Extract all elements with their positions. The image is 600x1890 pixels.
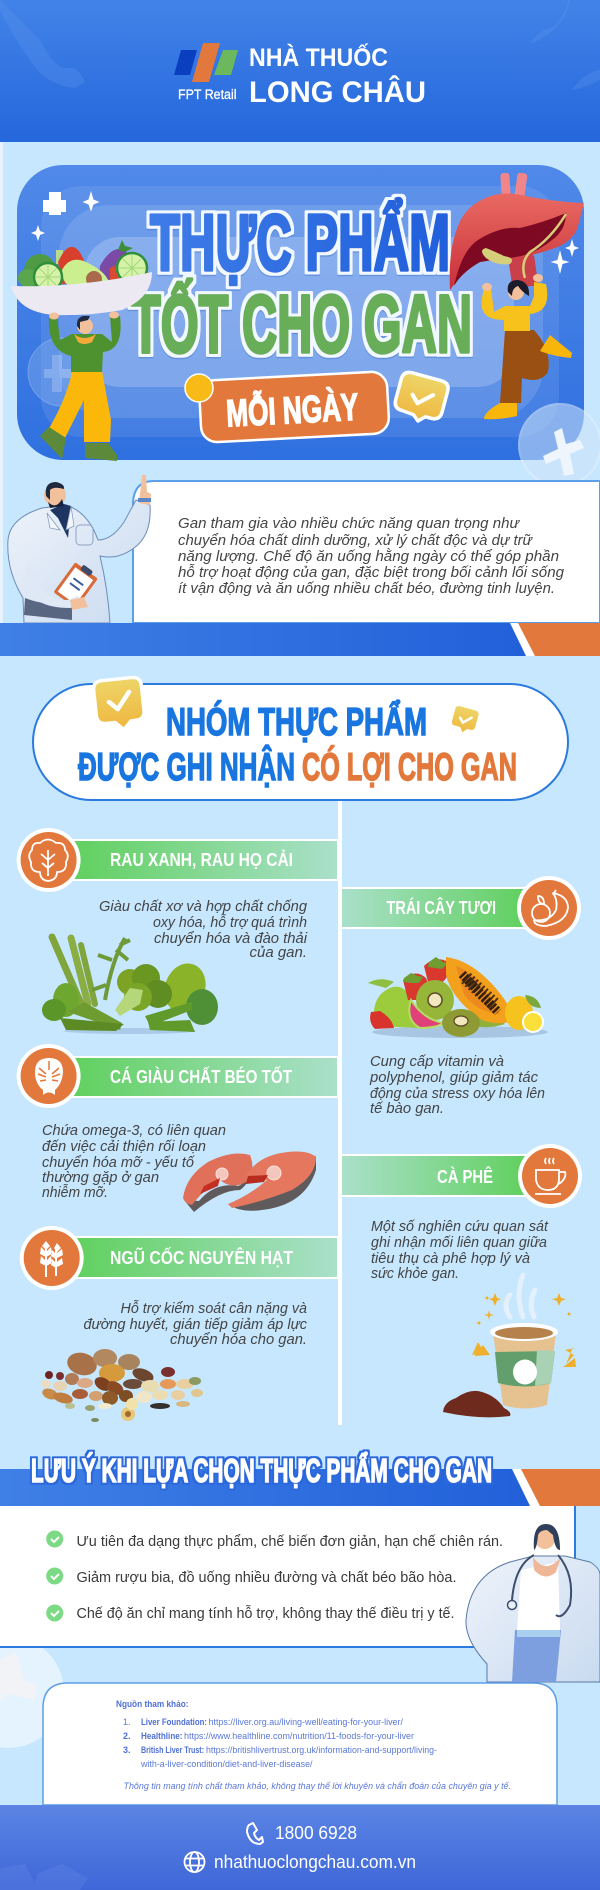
description: tế bào gan.: [370, 1101, 444, 1117]
title bar: CÁ GIÀU CHẤT BÉO TỐT: [110, 1066, 292, 1087]
description: đường huyết, gián tiếp giảm áp lực: [84, 1317, 308, 1333]
icon: fruit: [517, 876, 581, 940]
reference 3: [123, 1745, 437, 1769]
description: của gan.: [250, 945, 307, 961]
title bar: NGŨ CỐC NGUYÊN HẠT: [110, 1247, 293, 1268]
description: Giàu chất xơ và hợp chất chống: [99, 899, 307, 915]
illustration: woman holding liver: [481, 274, 572, 419]
description: đến việc cải thiện rối loạn: [42, 1139, 206, 1155]
band: blue and orange divider: [0, 623, 600, 656]
description: polyphenol, giúp giảm tác: [369, 1070, 539, 1086]
title bar: RAU XANH, RAU HỌ CẢI: [110, 849, 293, 870]
panel: whole grains: [20, 1226, 338, 1422]
panel: coffee: [342, 1144, 582, 1417]
reference 3: with-a-liver-condition/diet-and-liver-disease/: [140, 1759, 313, 1769]
section heading pill: [33, 684, 568, 800]
reference 3: British Liver Trust:: [141, 1745, 204, 1755]
man: [48, 371, 111, 442]
description: Chứa omega-3, có liên quan: [42, 1123, 226, 1139]
description: [84, 1300, 308, 1348]
description: Cung cấp vitamin và: [370, 1054, 504, 1070]
title bar: [342, 1155, 529, 1196]
description: sức khỏe gan.: [371, 1266, 459, 1282]
reference 2: 2.: [123, 1731, 131, 1741]
panel: references: [43, 1683, 557, 1805]
disclaimer: Thông tin mang tính chất tham khảo, không thay thế lời khuyên và chẩn đoán của chuyên gia y tế.: [124, 1781, 511, 1791]
description: [371, 1219, 549, 1282]
description: tiêu thụ cà phê hợp lý và: [371, 1251, 530, 1267]
description: chuyển hóa cho gan.: [170, 1332, 307, 1348]
illustration: male doctor pointing: [8, 475, 151, 623]
panel: notes list: [0, 1506, 575, 1647]
illustration: liver: [450, 172, 584, 290]
icon: phone: [247, 1823, 263, 1844]
description: [99, 899, 308, 961]
description: [42, 1123, 226, 1201]
icon: sparkles: [31, 191, 579, 274]
header band: [0, 0, 600, 142]
left edge stripe: [0, 142, 3, 623]
reference 3: https://britishlivertrust.org.uk/information-and-support/living-: [206, 1745, 437, 1755]
description: nhiễm mỡ.: [42, 1184, 108, 1201]
logo: FPT Retail mark: [174, 43, 238, 102]
description: chuyển hóa và đào thải: [154, 931, 308, 947]
panel: introduction text: năng lượng. Chế độ ăn uống hằng ngày có thể góp phần: [178, 548, 559, 565]
title bar: [70, 840, 338, 880]
reference 2: https://www.healthline.com/nutrition/11-foods-for-your-liver: [184, 1731, 414, 1741]
title bar: CÀ PHÊ: [437, 1166, 493, 1187]
description: [369, 1054, 545, 1117]
reference 1: https://liver.org.au/living-well/eating-for-your-liver/: [208, 1717, 403, 1727]
note 1: Ưu tiên đa dạng thực phẩm, chế biến đơn giản, hạn chế chiên rán.: [76, 1534, 503, 1550]
note 2: Giảm rượu bia, đồ uống nhiều đường và chất béo bão hòa.: [76, 1570, 456, 1586]
title bar: TRÁI CÂY TƯƠI: [386, 897, 496, 918]
panel: hero banner: [17, 165, 584, 460]
description: chuyển hóa mỡ - yếu tố: [42, 1155, 196, 1171]
icon: lettuce: [17, 828, 81, 892]
steak right: [228, 1155, 316, 1211]
hero title: [131, 198, 472, 370]
steak left: [184, 1160, 253, 1212]
badge: every day: [185, 371, 390, 443]
section heading pill: NHÓM THỰC PHẨM: [166, 699, 427, 744]
icon: coffee cup: [518, 1144, 582, 1208]
reference 2: Healthline:: [141, 1731, 182, 1741]
vegetables: [18, 240, 147, 291]
brand name: NHÀ THUỐC: [249, 42, 388, 72]
description: Hỗ trợ kiểm soát cân nặng và: [120, 1300, 307, 1317]
title bar: [72, 1237, 338, 1278]
section heading pill: ĐƯỢC GHI NHẬN: [78, 745, 295, 789]
note 3: Chế độ ăn chỉ mang tính hỗ trợ, không thay thế điều trị y tế.: [76, 1605, 454, 1622]
illustration: fruit pile: [368, 957, 548, 1038]
icon: fish steak: [17, 1044, 81, 1108]
logo: FPT Retail mark: FPT Retail: [178, 87, 236, 102]
icon: bubble lower left: [0, 1636, 64, 1748]
contact: website: nhathuoclongchau.com.vn: [214, 1852, 416, 1872]
reference 3: 3.: [123, 1745, 131, 1755]
footer band: [0, 1805, 600, 1890]
panel: introduction text: Gan tham gia vào nhiều chức năng quan trọng như: [178, 516, 521, 532]
illustration: salmon steaks: [183, 1152, 316, 1212]
reference 1: 1.: [123, 1717, 131, 1727]
illustration: nuts and seeds: [41, 1349, 203, 1422]
panel: fresh fruit: [342, 876, 581, 1117]
brand name: LONG CHÂU: [249, 75, 426, 109]
description: oxy hóa, hỗ trợ quá trình: [153, 914, 307, 931]
reference 1: Liver Foundation:: [141, 1717, 207, 1727]
icon: check sticker small: [449, 704, 481, 737]
icon: white cross: [43, 192, 66, 215]
icon: check sticker large: [93, 677, 146, 732]
badge: every day: MỖI NGÀY: [225, 384, 359, 436]
panel: references: Nguồn tham khảo:: [116, 1699, 188, 1709]
bowl: [11, 272, 152, 315]
title bar: [70, 1057, 338, 1097]
vertical divider: [338, 795, 342, 1425]
icon: bubble hero bottom right: [519, 404, 600, 486]
illustration: man holding salad bowl: [11, 240, 152, 461]
icon: globe: [184, 1852, 204, 1872]
illustration: female doctor: [466, 1524, 600, 1682]
band: notes heading: [0, 1469, 600, 1506]
icon: check sticker hero: [392, 371, 450, 426]
panel: leafy greens: [17, 828, 338, 1034]
icon: bubble left: [28, 338, 96, 406]
description: thường gặp ở gan: [42, 1170, 159, 1186]
panel: introduction text: hỗ trợ hoạt động của gan, đặc biệt trong bối cảnh lối sống: [178, 564, 564, 581]
panel: introduction text: ít vận động và ăn uống nhiều chất béo, đường tinh luyện.: [178, 581, 555, 597]
title bar: [342, 888, 527, 928]
reference 1: [123, 1717, 403, 1727]
panel: fatty fish: [17, 1044, 338, 1212]
brand name: [249, 42, 426, 109]
illustration: vegetables: [42, 937, 218, 1034]
panel: introduction text: chuyển hóa chất dinh dưỡng, xử lý chất độc và dự trữ: [178, 533, 534, 549]
contact: phone number: 1800 6928: [275, 1823, 357, 1843]
description: động của stress oxy hóa lên: [370, 1086, 545, 1102]
description: Một số nghiên cứu quan sát: [371, 1219, 549, 1235]
icon: wheat: [20, 1226, 84, 1290]
description: ghi nhận mối liên quan giữa: [371, 1235, 547, 1251]
illustration: coffee cup and beans: [443, 1275, 576, 1417]
panel: introduction text: [133, 481, 600, 623]
